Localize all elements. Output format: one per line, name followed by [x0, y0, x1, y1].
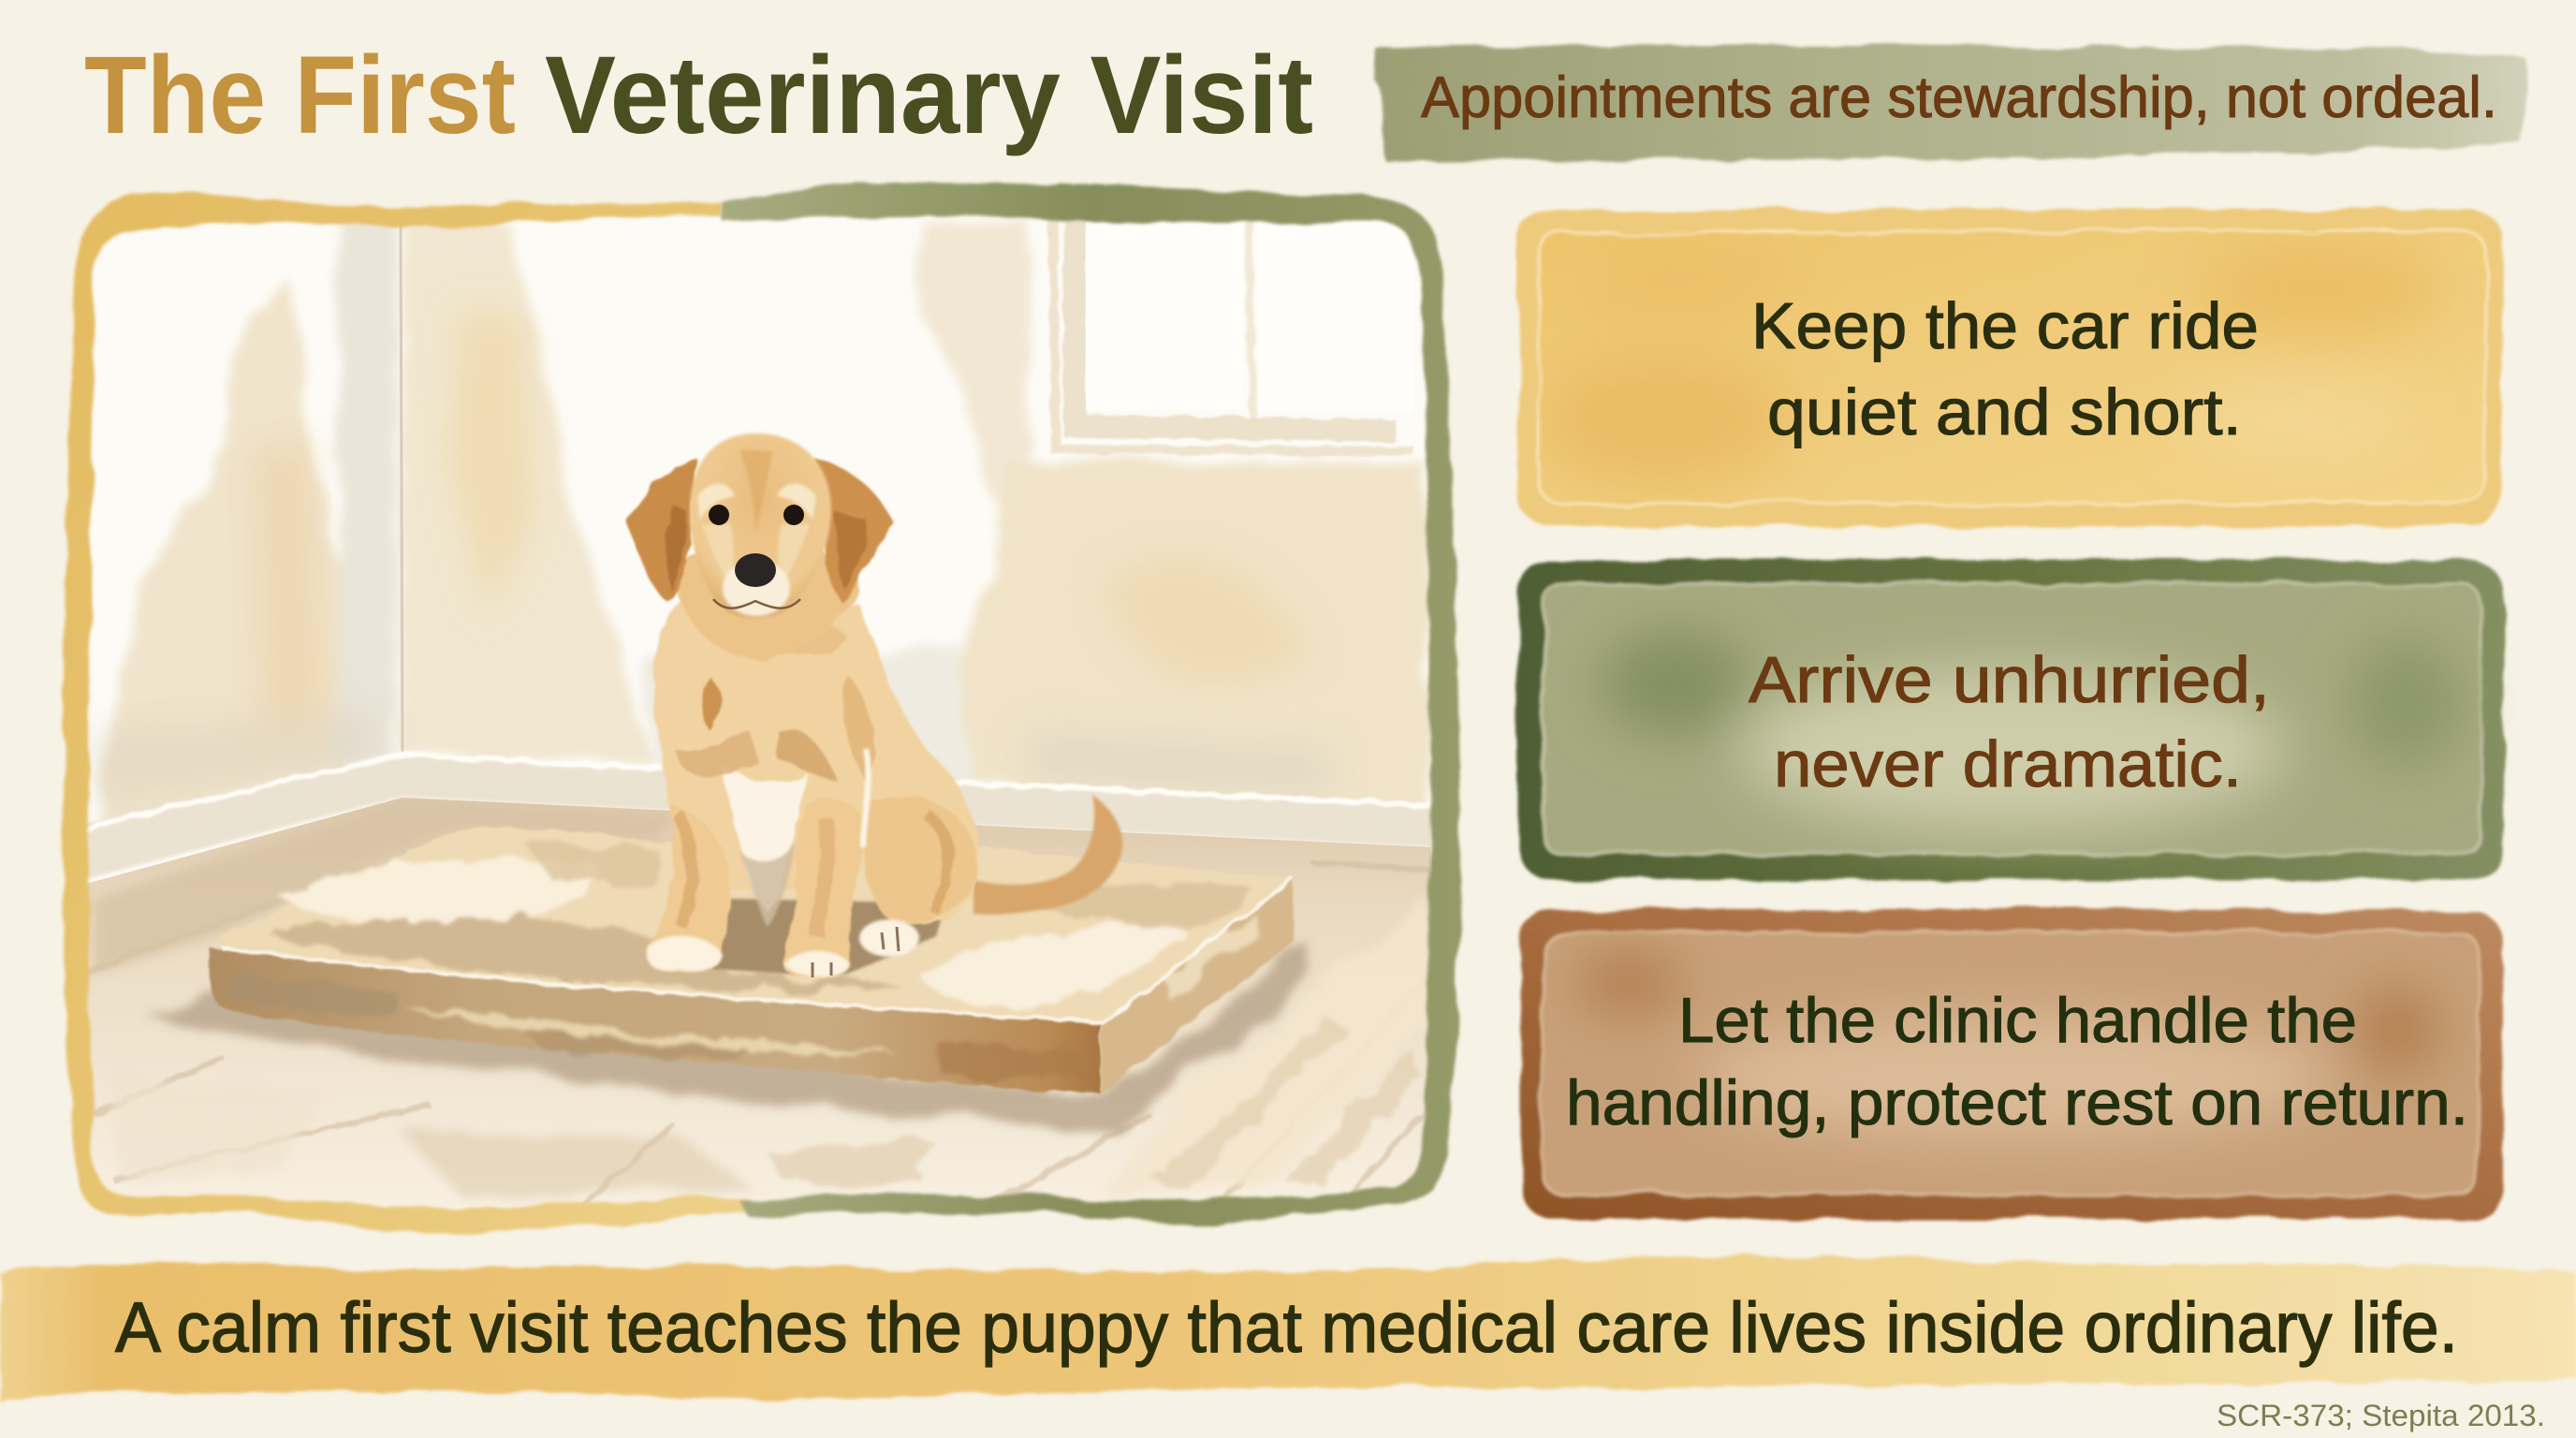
frame: olive right side — [721, 182, 1460, 1227]
scene — [82, 220, 1432, 1217]
mouth — [713, 599, 800, 609]
bed piping — [221, 878, 1294, 1022]
neck ruff — [676, 543, 858, 660]
card text: never dramatic. — [1774, 727, 2242, 800]
toes — [812, 927, 899, 977]
dog bed — [209, 828, 1294, 1093]
frame: gold left side — [64, 192, 749, 1234]
card wash — [1518, 210, 2503, 526]
card wash — [1518, 560, 2503, 880]
torso — [653, 599, 979, 923]
floor planks — [84, 861, 1432, 1217]
card text: handling, protect rest on return. — [1566, 1067, 2468, 1138]
subtitle wash — [1374, 44, 2528, 161]
bed top — [221, 828, 1294, 1022]
floor — [82, 798, 1432, 1217]
ears — [627, 459, 893, 603]
band text: A calm first visit teaches the puppy that medical care lives inside ordinary life. — [115, 1288, 2458, 1368]
floor patches — [112, 899, 1432, 1203]
window frame — [1053, 220, 1413, 451]
head — [690, 433, 831, 618]
paper — [86, 217, 1430, 1206]
panel: puppy illustration — [64, 182, 1460, 1234]
source credit: SCR-373; Stepita 2013. — [2217, 1399, 2545, 1432]
card text: quiet and short. — [1767, 375, 2242, 448]
white chest — [721, 763, 807, 913]
card text: Arrive unhurried, — [1749, 643, 2270, 716]
card text — [1749, 643, 2270, 800]
baseboard — [82, 755, 1432, 880]
card: arrive unhurried — [1518, 560, 2503, 880]
muzzle — [723, 560, 790, 616]
warm wall glows — [94, 309, 1329, 805]
floor shadow under puppy — [711, 899, 945, 974]
card text — [1566, 985, 2468, 1138]
back floor patch — [94, 800, 674, 974]
head highlights — [697, 449, 816, 585]
nose — [735, 553, 776, 587]
card mottling — [1544, 243, 2443, 487]
wall washes — [94, 220, 1432, 824]
card: clinic handling — [1520, 910, 2503, 1219]
left front leg — [647, 805, 730, 971]
band wash — [0, 1257, 2576, 1402]
subtitle text: Appointments are stewardship, not ordeal. — [1421, 66, 2497, 130]
window panes — [1086, 221, 1090, 410]
card wash — [1520, 910, 2503, 1219]
title: gold words: The First — [84, 34, 516, 157]
white fur edge — [863, 749, 868, 847]
subtitle band — [1374, 44, 2528, 161]
chest shadow — [739, 843, 796, 927]
corner line — [401, 225, 402, 755]
takeaway band — [0, 1257, 2576, 1402]
card glow — [1601, 632, 2462, 829]
bed side — [209, 947, 1101, 1093]
fur patches — [674, 620, 949, 936]
card text: Keep the car ride — [1751, 289, 2259, 362]
floor streaks — [768, 1020, 1423, 1189]
card glow — [1577, 957, 2438, 1137]
card text: Let the clinic handle the — [1678, 985, 2357, 1056]
paws — [647, 919, 919, 977]
puppy — [627, 433, 1122, 977]
title — [84, 34, 1313, 157]
card text — [1751, 289, 2259, 448]
eyes — [709, 505, 804, 525]
card: car ride — [1518, 210, 2503, 526]
haunch — [863, 796, 977, 925]
bed blotches — [225, 843, 1259, 1081]
baseboard highlight — [82, 755, 1432, 829]
right front leg — [784, 799, 866, 977]
title: olive words: Veterinary Visit — [545, 34, 1313, 157]
bed end — [1101, 880, 1294, 1093]
tail — [973, 795, 1122, 915]
